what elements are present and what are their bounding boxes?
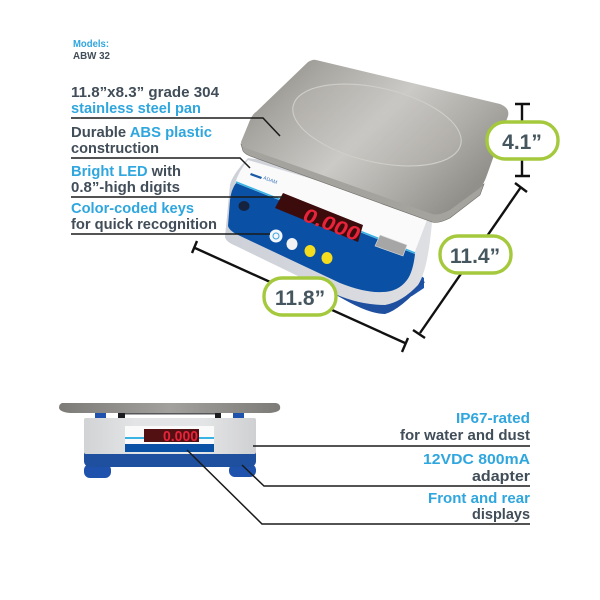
scale: angled product view bbox=[225, 60, 508, 314]
scale base blue edge bbox=[318, 270, 425, 314]
brand label: ADAM bbox=[262, 175, 278, 186]
key: function bbox=[286, 238, 298, 250]
LED display bbox=[275, 193, 363, 242]
feature: ABS plastic construction bbox=[71, 124, 212, 157]
models label: ABW 32 bbox=[73, 51, 110, 62]
steel pan top bbox=[241, 60, 508, 214]
speckled underside band bbox=[120, 412, 220, 414]
pan supports bbox=[95, 412, 244, 418]
feature: bright LED: Bright LED with bbox=[71, 163, 181, 180]
key: yellow tare bbox=[304, 245, 316, 257]
round port bbox=[238, 201, 250, 211]
pan underside rim bbox=[241, 144, 484, 222]
blue base bbox=[84, 452, 256, 467]
feature: color-coded keys bbox=[71, 200, 217, 233]
grey body bbox=[84, 418, 256, 454]
blue control panel bbox=[228, 183, 415, 292]
callout: 12VDC adapter: 12VDC 800mA bbox=[423, 451, 530, 468]
leader line: keys bbox=[71, 233, 270, 235]
front pan bbox=[59, 403, 280, 413]
key: yellow percent bbox=[322, 252, 332, 264]
dimension: depth: 11.4” bbox=[450, 245, 500, 268]
front panel blue bbox=[125, 444, 214, 452]
models label: Models: bbox=[73, 39, 109, 50]
callout: IP67-rated: IP67-rated bbox=[456, 410, 530, 427]
LED digits: 0.000 bbox=[299, 205, 364, 246]
feet bbox=[84, 464, 111, 478]
grey badge bbox=[375, 235, 407, 256]
feature: stainless steel pan bbox=[71, 84, 220, 117]
cyan stripe bbox=[236, 182, 415, 253]
feature: bright LED bbox=[71, 163, 181, 196]
dimension: width bbox=[192, 241, 408, 352]
front display bbox=[144, 429, 199, 442]
leader line: construction bbox=[71, 158, 250, 168]
feature: stainless steel pan: 11.8”x8.3” grade 304 bbox=[71, 84, 220, 101]
feature: ABS plastic construction: construction bbox=[71, 140, 159, 157]
callout: front and rear displays bbox=[428, 490, 530, 523]
callout line: IP67 bbox=[253, 445, 530, 447]
callout: front and rear displays: displays bbox=[472, 506, 530, 523]
dimension: height: 4.1” bbox=[502, 131, 542, 154]
foot right bbox=[396, 268, 424, 300]
callout: front and rear displays: Front and rear bbox=[428, 490, 530, 507]
scale white shell bbox=[225, 158, 436, 305]
callout line: adapter bbox=[242, 465, 530, 486]
scale: front view bbox=[59, 403, 280, 478]
callout: IP67-rated bbox=[400, 410, 530, 444]
leader line: LED bbox=[71, 196, 284, 198]
callout: 12VDC adapter: adapter bbox=[472, 468, 530, 485]
callout line: displays bbox=[187, 450, 530, 524]
front cyan stripe bbox=[125, 437, 214, 439]
callout: 12VDC adapter bbox=[423, 451, 530, 485]
scale top white panel bbox=[235, 160, 430, 254]
dimension: height bbox=[487, 104, 558, 176]
brand logo block bbox=[250, 173, 262, 179]
leader line: pan bbox=[71, 118, 280, 136]
callout: IP67-rated: for water and dust bbox=[400, 427, 530, 444]
feature: color-coded keys: for quick recognition bbox=[71, 216, 217, 233]
feature: bright LED: 0.8”-high digits bbox=[71, 179, 180, 196]
front panel white bbox=[125, 426, 214, 444]
pan oval recess bbox=[285, 70, 469, 180]
front digits: 0.000 bbox=[163, 428, 198, 445]
dimension: depth bbox=[413, 183, 527, 338]
key: power bbox=[270, 230, 282, 242]
dimension: width: 11.8” bbox=[275, 287, 325, 310]
feature: color-coded keys: Color-coded keys bbox=[71, 200, 194, 217]
feature: stainless steel pan: stainless steel pan bbox=[71, 100, 201, 117]
feature: ABS plastic construction: Durable ABS plastic bbox=[71, 124, 212, 141]
models label bbox=[73, 39, 110, 62]
